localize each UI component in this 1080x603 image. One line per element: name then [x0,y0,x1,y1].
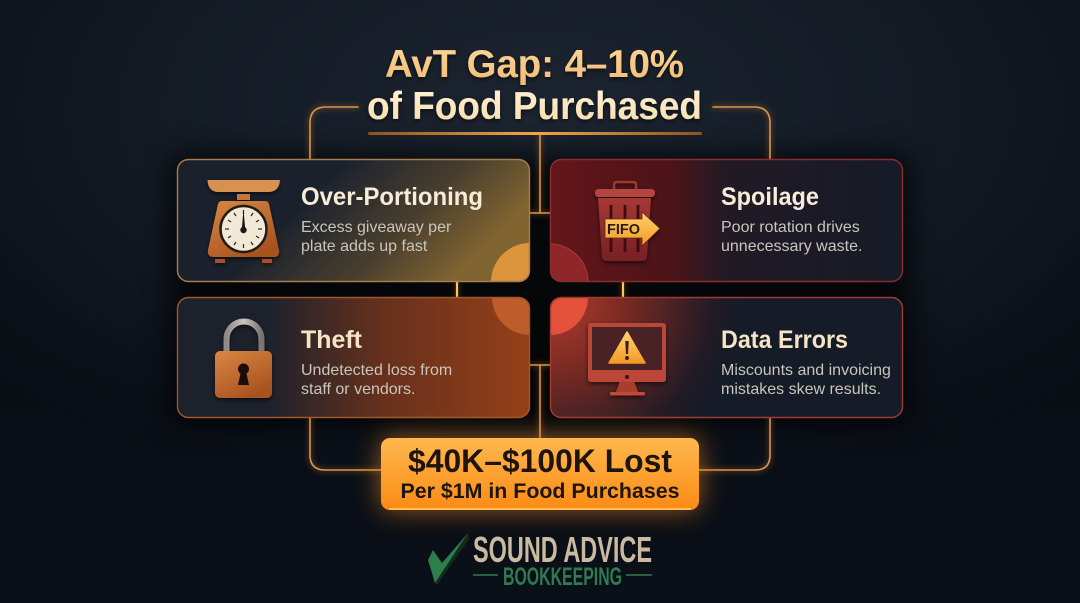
description: spoilage: unnecessary waste. [721,238,862,255]
callout: dollars lost: $40K–$100K Lost [408,443,672,479]
title [367,43,702,128]
icon: FIFO trash can [595,182,660,261]
icon: FIFO trash can: FIFO [607,221,640,238]
logo subtitle: BOOKKEEPING [503,563,622,591]
title: of Food Purchased [367,85,702,128]
description: theft: Undetected loss from [301,362,452,379]
callout: dollars lost: Per $1M in Food Purchases [400,480,680,503]
title underline [368,132,702,135]
panel: spoilage [550,158,904,282]
logo: Sound Advice Bookkeeping [428,529,652,591]
icon: kitchen scale [208,180,280,263]
description: theft: staff or vendors. [301,381,415,398]
panel: over-portioning [176,158,530,282]
description: data errors: Miscounts and invoicing [721,362,891,379]
icon: padlock [215,322,272,398]
logo wordmark: SOUND ADVICE [473,529,652,570]
panel: theft [176,296,530,418]
description: over-portioning: plate adds up fast [301,238,428,255]
heading: theft: Theft [301,326,363,354]
panel: data errors [550,296,904,418]
callout: dollars lost [381,438,699,510]
heading: spoilage: Spoilage [721,183,819,211]
description: data errors: mistakes skew results. [721,381,881,398]
icon: monitor with warning [588,323,666,396]
description: over-portioning: Excess giveaway per [301,219,452,236]
heading: over-portioning: Over-Portioning [301,183,483,211]
heading: data errors: Data Errors [721,326,848,354]
title: AvT Gap: 4–10% [385,43,684,86]
icon: green check mark [428,533,469,585]
connector lines [310,107,770,470]
description: spoilage: Poor rotation drives [721,219,860,236]
